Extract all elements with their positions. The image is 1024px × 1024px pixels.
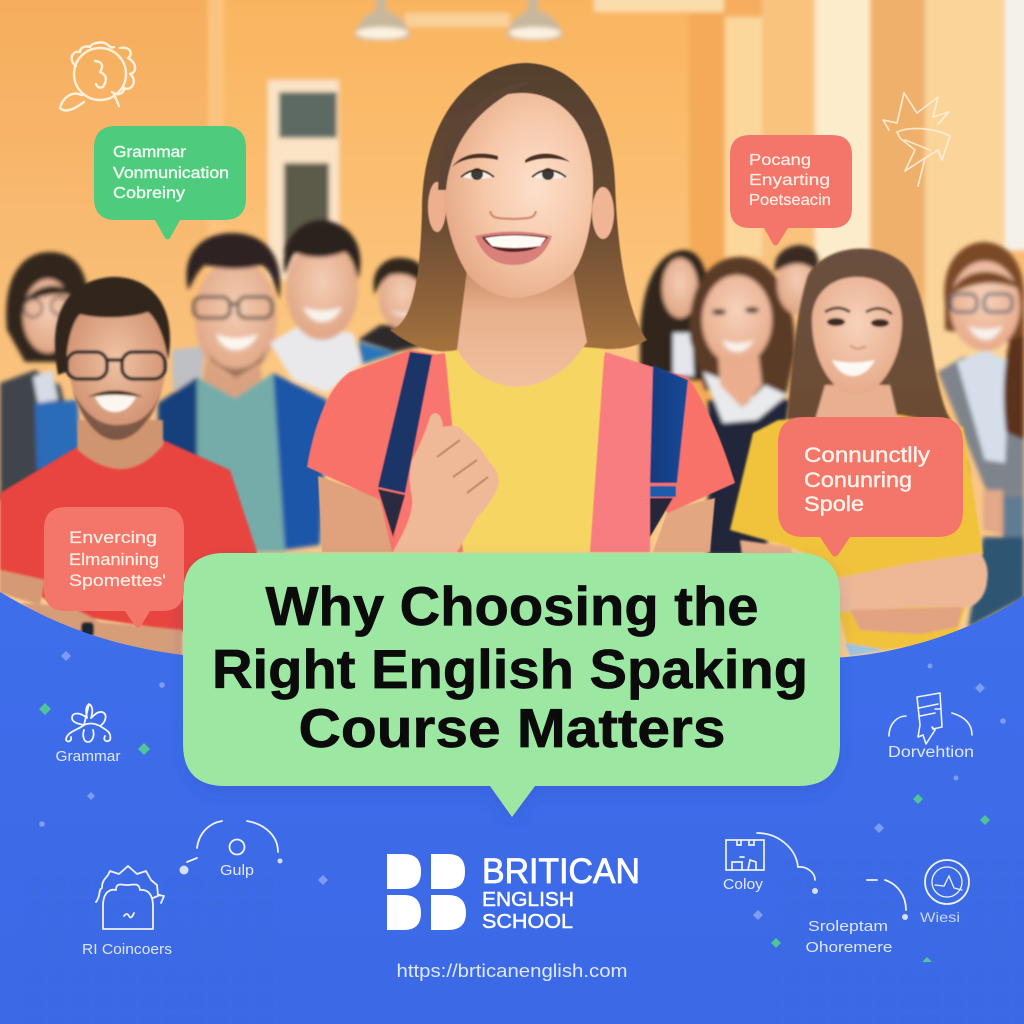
mouth bbox=[475, 232, 552, 265]
student: woman smiling right bbox=[690, 257, 795, 555]
hair bbox=[55, 277, 170, 375]
student: man far behind bbox=[358, 258, 428, 352]
icon and label: RI Coincoers bbox=[82, 866, 172, 958]
website url: https://brticanenglish.com bbox=[396, 960, 628, 981]
callout: coral top right bbox=[730, 135, 852, 246]
student: grey shoulder behind man bbox=[172, 346, 205, 390]
fist bbox=[393, 413, 499, 552]
callout: coral right: Spole bbox=[804, 493, 864, 516]
callout: coral left: Envercing bbox=[69, 529, 157, 547]
icon and label: Wiesi bbox=[867, 860, 969, 925]
student: far left woman bbox=[0, 252, 90, 500]
title bubble bbox=[183, 553, 840, 817]
title: Course Matters bbox=[298, 697, 726, 759]
student: front woman right bbox=[730, 249, 988, 656]
classroom background bbox=[0, 0, 1024, 690]
neck bbox=[815, 385, 898, 420]
logo wordmark: BRITICAN bbox=[482, 852, 640, 891]
icon and label: Grammar bbox=[56, 704, 120, 765]
icon and label: Gulp: Gulp bbox=[220, 862, 254, 879]
nose bbox=[490, 211, 536, 219]
logo wordmark bbox=[482, 852, 640, 933]
neck bbox=[78, 420, 163, 469]
label: Sroleptam Ohoremere: Sroleptam bbox=[808, 918, 888, 935]
brows bbox=[452, 153, 570, 167]
blue lower section bbox=[0, 592, 1024, 1024]
coral inner left bbox=[392, 353, 452, 552]
callout: coral left: Spomettes' bbox=[69, 572, 166, 590]
neck bbox=[457, 270, 587, 387]
callout: coral right bbox=[778, 417, 963, 556]
student: woman far behind right bbox=[640, 250, 709, 380]
moustache bbox=[87, 390, 143, 397]
icon and label: Coloy bbox=[723, 833, 818, 894]
coral inner right bbox=[590, 352, 653, 552]
student: woman with glasses right bbox=[938, 242, 1024, 537]
yellow shirt bbox=[730, 415, 983, 655]
callout: coral left bbox=[44, 507, 184, 628]
logo wordmark: ENGLISH bbox=[482, 888, 574, 911]
logo mark bbox=[387, 854, 466, 930]
icon and label: Dorvehtion: Dorvehtion bbox=[888, 744, 974, 761]
icon and label: Gulp bbox=[180, 821, 282, 879]
student: man behind right bbox=[775, 245, 818, 314]
sparkles bbox=[39, 651, 1006, 962]
callout: coral right: Connunctlly bbox=[804, 444, 931, 467]
yellow tee bbox=[445, 344, 605, 552]
teeth bbox=[95, 395, 136, 412]
icon: doodle star top right bbox=[883, 93, 950, 186]
label: Sroleptam Ohoremere: Ohoremere bbox=[806, 939, 892, 956]
hair part left bbox=[438, 80, 535, 190]
callout: coral top right: Pocang bbox=[749, 152, 811, 169]
background students bbox=[0, 220, 1024, 628]
student: seated jeans bbox=[968, 537, 1024, 628]
head bbox=[67, 305, 167, 440]
crossed arms bbox=[837, 553, 988, 612]
glasses bbox=[67, 352, 165, 379]
callout: coral top right: Enyarting bbox=[749, 172, 830, 189]
face bbox=[812, 277, 902, 395]
callout: coral right: Conunring bbox=[804, 469, 912, 492]
right arm bbox=[653, 498, 715, 552]
right strap bbox=[650, 365, 688, 483]
arms bbox=[0, 570, 45, 605]
title: Why Choosing the bbox=[266, 575, 758, 637]
student: man with blue blazer bbox=[158, 233, 327, 555]
title: Right English Spaking bbox=[212, 638, 808, 700]
eyes bbox=[462, 172, 493, 179]
icon and label: Grammar: Grammar bbox=[56, 748, 120, 765]
callout: green top left bbox=[94, 126, 246, 240]
callout: coral left: Elmanining bbox=[69, 551, 159, 569]
icon and label: Coloy: Coloy bbox=[723, 876, 764, 893]
arm left bbox=[740, 540, 795, 558]
main student bbox=[307, 63, 735, 552]
label: Sroleptam Ohoremere bbox=[806, 918, 892, 956]
beard bbox=[72, 390, 162, 440]
dot texture bbox=[20, 860, 1024, 1024]
icon and label: Dorvehtion bbox=[888, 693, 974, 761]
icon: doodle magnifier top left bbox=[60, 43, 135, 110]
callout: green top left: Vonmunication bbox=[113, 165, 229, 182]
left strap bbox=[378, 352, 432, 493]
coral t-shirt bbox=[307, 350, 735, 552]
ears bbox=[428, 182, 446, 232]
logo wordmark: SCHOOL bbox=[482, 910, 573, 933]
icon and label: Wiesi: Wiesi bbox=[920, 909, 960, 925]
callout: green top left: Cobreiny bbox=[113, 185, 185, 202]
title bbox=[212, 575, 808, 759]
left arm bbox=[318, 476, 392, 552]
callout: coral top right: Poetseacin bbox=[749, 192, 831, 209]
student: man in white shirt bbox=[270, 220, 397, 393]
icon and label: RI Coincoers: RI Coincoers bbox=[82, 941, 172, 958]
hair bbox=[778, 249, 971, 500]
student: front man with glasses bbox=[0, 277, 257, 660]
red shirt bbox=[0, 440, 257, 640]
hair bbox=[390, 63, 647, 351]
face bbox=[443, 93, 593, 298]
callout: green top left: Grammar bbox=[113, 144, 187, 161]
